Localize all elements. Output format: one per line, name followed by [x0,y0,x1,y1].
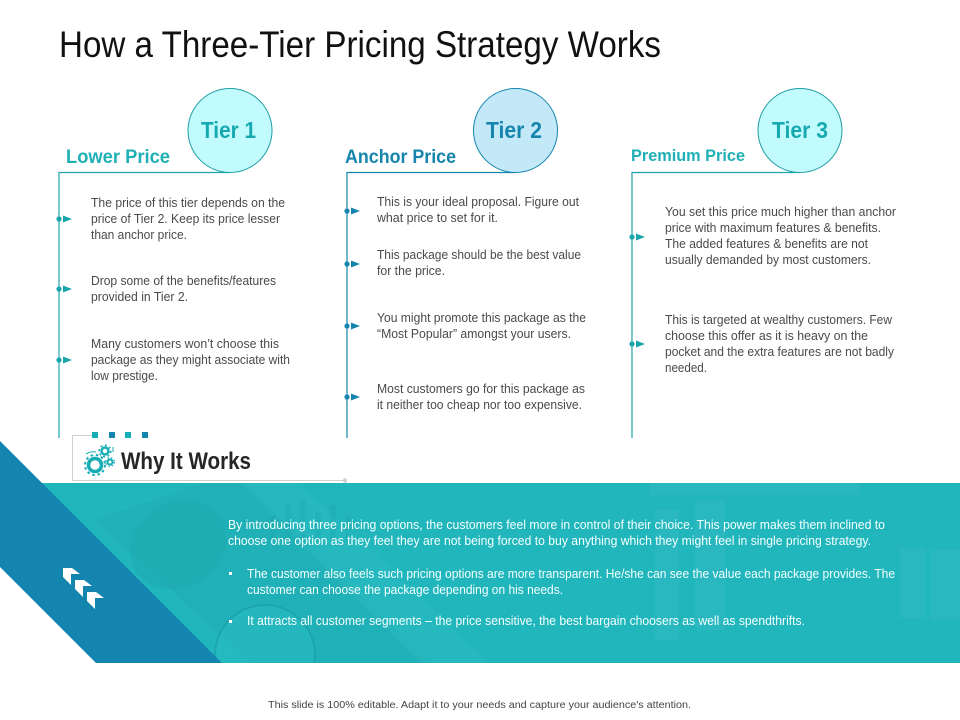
icon: gears [85,445,114,475]
icon: chevrons [63,568,104,609]
heading text: Why It Works [121,448,251,475]
tier 1 text: than anchor price. [91,228,187,242]
tier 1 text: low prestige. [91,369,158,383]
panel: why it works band [42,483,960,663]
accent squares [92,432,148,438]
tier 1 text: provided in Tier 2. [91,290,188,304]
tier 3 text: This is targeted at wealthy customers. Few [665,313,893,327]
tier 1 label: Tier 1 [201,117,256,143]
panel: tier 1 [56,88,290,438]
tier 2 heading: Anchor Price [345,147,456,168]
tier 3 markers [629,234,645,348]
tier 3 text: price with maximum features & benefits. [665,221,881,235]
tier 1 heading: Lower Price [66,147,170,168]
tier 3 circle [758,88,842,172]
tier 2 markers [344,208,360,400]
tier 1 text: package as they might associate with [91,353,290,367]
tier 3 text: The added features & benefits are not [665,237,868,251]
tier 2 text: for the price. [377,264,445,278]
tier 1 connector lines [59,172,230,438]
tier 1 text: price of Tier 2. Keep its price lesser [91,212,280,226]
panel: tier 3 [629,88,896,438]
band background [40,483,960,663]
intro text [228,518,885,548]
tier 2 text: This package should be the best value [377,248,581,262]
bullet list [229,567,895,628]
intro text: choose one option as they feel they are not being forced to buy anything which they might feel in single pricing strategy. [228,534,871,548]
tier 2 connector lines [347,172,515,438]
tier 3 text: usually demanded by most customers. [665,253,871,267]
tier 3 text: You set this price much higher than anchor [665,205,896,219]
tier 2 circle [474,88,558,172]
tier 2 text: it neither too cheap nor too expensive. [377,398,582,412]
tier 2 text [376,195,586,412]
tier 3 text: pocket and the extra features are not badly [665,345,895,359]
why it works heading box [72,432,347,483]
tier 3 label: Tier 3 [772,117,828,143]
tier 1 text [91,196,290,383]
tier 2 text: You might promote this package as the [377,311,586,325]
tier 2 text: “Most Popular” amongst your users. [377,327,571,341]
tier 3 heading: Premium Price [631,146,745,165]
diagonal blue ribbon [0,441,222,663]
bullet list: customer can choose the package depending on his needs. [247,583,563,597]
tier 2 text: This is your ideal proposal. Figure out [377,195,580,209]
panel: tier 2 [344,88,586,438]
tier 3 connector lines [632,172,800,438]
bullet list: It attracts all customer segments – the price sensitive, the best bargain choosers as well as spendthrifts. [247,614,805,628]
title: How a Three-Tier Pricing Strategy Works [59,24,661,65]
tier 3 text: choose this offer as it is heavy on the [665,329,868,343]
tier 3 text: needed. [665,361,707,375]
tier 1 markers [56,216,72,364]
tier 3 text [665,205,896,375]
tier 1 text: The price of this tier depends on the [91,196,285,210]
tier 1 circle [188,88,272,172]
texture: dollar bill and chart [130,501,316,663]
tier 2 label: Tier 2 [486,117,542,143]
footer note: This slide is 100% editable. Adapt it to your needs and capture your audience's attention. [268,700,691,711]
intro text: By introducing three pricing options, the customers feel more in control of their choice. This power makes them inclined to [228,518,885,532]
tier 1 text: Many customers won’t choose this [91,337,279,351]
bullet list: The customer also feels such pricing options are more transparent. He/she can see the value each package provides. The [247,567,895,581]
tier 1 text: Drop some of the benefits/features [91,274,276,288]
tier 2 text: Most customers go for this package as [377,382,585,396]
box outline [72,436,345,480]
tier 2 text: what price to set for it. [376,211,498,225]
